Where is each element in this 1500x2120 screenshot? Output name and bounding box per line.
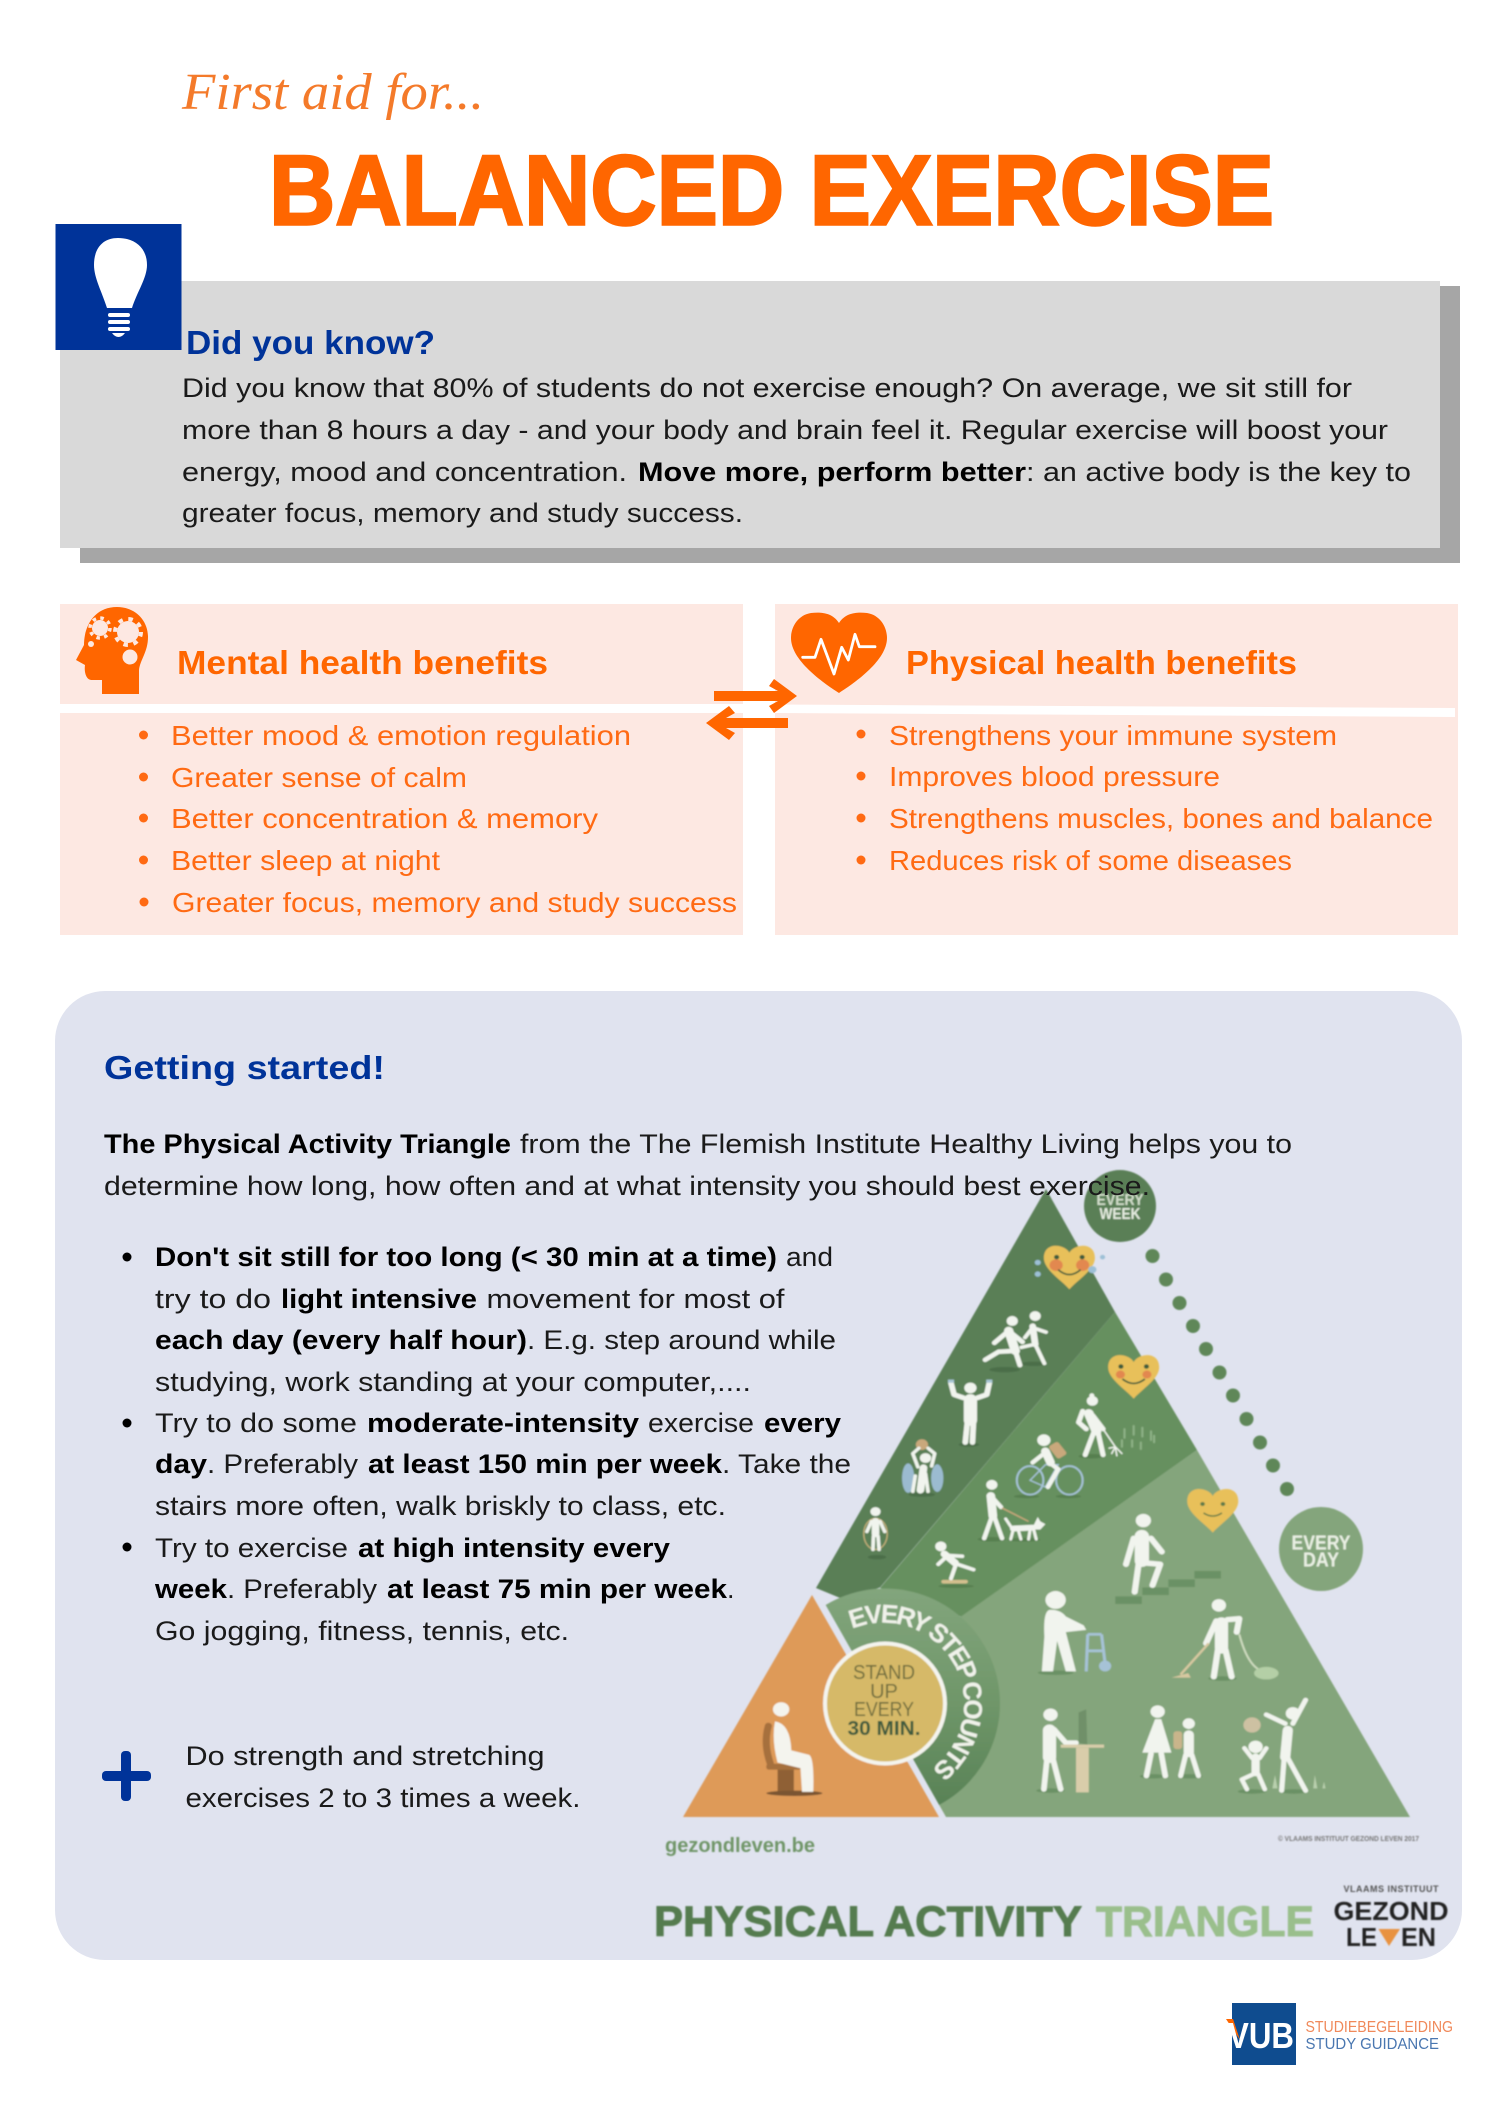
circle: stand up every 30 min: EVERY bbox=[854, 1699, 914, 1721]
list: mental benefits: Greater focus, memory and study success bbox=[172, 887, 737, 918]
icon: light bulb bbox=[56, 224, 182, 350]
list: mental benefits: Better mood & emotion regulation bbox=[171, 720, 631, 751]
list: activity recommendations: and bbox=[786, 1242, 833, 1272]
source: gezondleven.be: gezondleven.be bbox=[665, 1835, 815, 1857]
text: did you know body: greater focus, memory and study success. bbox=[182, 498, 743, 528]
icon: skateboarder bbox=[935, 1541, 974, 1588]
list: activity recommendations: Don't sit still for too long (< 30 min at a time) bbox=[155, 1242, 777, 1272]
circle: stand up every 30 min: UP bbox=[870, 1681, 898, 1703]
circle: stand up every 30 min: STAND bbox=[853, 1662, 915, 1684]
icon: gardener bbox=[1079, 1393, 1154, 1458]
segment: moderate intensity bbox=[880, 1312, 1197, 1616]
arrows: two-way exchange bbox=[706, 679, 797, 740]
heading: Did you know?: Did you know? bbox=[186, 324, 435, 361]
list: activity recommendations: try to do bbox=[155, 1284, 271, 1314]
list: activity recommendations: Try to do some bbox=[155, 1408, 357, 1438]
list: activity recommendations: movement for most of bbox=[486, 1284, 785, 1314]
text: did you know body: more than 8 hours a day - and your body and brain feel it. Regular exercise will boost your bbox=[182, 415, 1388, 445]
label: every step counts: EVERY STEP COUNTS bbox=[848, 1604, 984, 1780]
icon: person at standing desk bbox=[1036, 1708, 1104, 1793]
icon: runners bbox=[985, 1311, 1046, 1372]
list: activity recommendations: week bbox=[154, 1574, 228, 1604]
segment: high intensity bbox=[816, 1189, 1115, 1600]
band: every step counts ring bbox=[825, 1588, 1000, 1805]
badge: every week: EVERY bbox=[1096, 1192, 1144, 1209]
icon: person vacuuming bbox=[1171, 1599, 1279, 1681]
list: activity recommendations: moderate-intensity bbox=[367, 1408, 639, 1438]
badge: every day bbox=[1279, 1507, 1363, 1591]
icon: heart face light bbox=[1187, 1489, 1238, 1533]
dotted frequency line bbox=[1146, 1249, 1294, 1496]
segment: light intensity bbox=[880, 1450, 1410, 1817]
list: mental benefits: Better concentration & memory bbox=[171, 803, 598, 834]
list: activity recommendations: Go jogging, fitness, tennis, etc. bbox=[155, 1616, 569, 1646]
text: did you know body bbox=[182, 373, 1411, 528]
icon: dog walker bbox=[978, 1480, 1045, 1541]
text: triangle introduction: determine how long, how often and at what intensity you should best exercise. bbox=[104, 1171, 1150, 1201]
list: activity recommendations: light intensive bbox=[281, 1284, 477, 1314]
logo: VUB study guidance: STUDY GUIDANCE bbox=[1306, 2036, 1439, 2053]
icon: person with walking frame bbox=[1038, 1591, 1111, 1675]
logo: gezond leven: LE bbox=[1346, 1922, 1377, 1952]
icon: wheelchair athlete bbox=[902, 1439, 943, 1497]
text: strength and stretching: exercises 2 to 3 times a week. bbox=[186, 1783, 580, 1813]
list: activity recommendations: at least 75 min per week bbox=[387, 1574, 728, 1604]
panel: did you know bbox=[56, 224, 1460, 563]
chart title: physical activity triangle: PHYSICAL ACTIVITY bbox=[654, 1898, 1082, 1946]
text: did you know body: : an active body is the key to bbox=[1026, 457, 1411, 487]
list: activity recommendations: each day (every half hour) bbox=[155, 1325, 527, 1355]
kicker: First aid for...: First aid for... bbox=[181, 64, 484, 121]
list: activity recommendations: every bbox=[764, 1408, 841, 1438]
heading: mental health benefits: Mental health benefits bbox=[177, 644, 548, 681]
text: triangle introduction: from the The Flemish Institute Healthy Living helps you to bbox=[520, 1129, 1292, 1159]
text: did you know body: energy, mood and concentration. bbox=[182, 457, 627, 487]
text: did you know body: Did you know that 80% of students do not exercise enough? On average, we sit still for bbox=[182, 373, 1352, 403]
chart title: physical activity triangle: TRIANGLE bbox=[1096, 1898, 1314, 1946]
text: strength and stretching bbox=[186, 1741, 580, 1813]
icon: heart face every week bbox=[1035, 1246, 1105, 1289]
panel: mental health benefits bbox=[60, 604, 743, 935]
logo: gezond leven: VLAAMS INSTITUUT bbox=[1344, 1884, 1439, 1894]
list: activity recommendations: Try to exercise bbox=[155, 1533, 348, 1563]
panel: getting started bbox=[55, 991, 1462, 1960]
icon: stair climber bbox=[1115, 1514, 1221, 1604]
heading: getting started: Getting started! bbox=[104, 1049, 385, 1086]
list: activity recommendations: . Take the bbox=[722, 1449, 851, 1479]
list: mental benefits bbox=[139, 720, 737, 918]
copyright: © VLAAMS INSTITUUT GEZOND LEVEN 2017 bbox=[1278, 1834, 1419, 1843]
text: strength and stretching: Do strength and stretching bbox=[186, 1741, 544, 1771]
icon: cyclist bbox=[1014, 1434, 1083, 1498]
icon: head with gears bbox=[76, 607, 148, 694]
logo: gezond leven bbox=[1334, 1884, 1448, 1952]
icon: heart face every day bbox=[1108, 1355, 1159, 1399]
chart: physical activity triangle bbox=[654, 1169, 1448, 1952]
list: activity recommendations bbox=[122, 1242, 851, 1646]
icon: person with weights bbox=[948, 1381, 992, 1447]
text: did you know body: Move more, perform better bbox=[638, 457, 1027, 487]
logo: VUB study guidance bbox=[1226, 2003, 1453, 2065]
list: activity recommendations: . Preferably bbox=[207, 1449, 359, 1479]
list: activity recommendations: stairs more often, walk briskly to class, etc. bbox=[155, 1491, 726, 1521]
list: activity recommendations: exercise bbox=[648, 1408, 754, 1438]
logo: VUB study guidance: STUDIEBEGELEIDING bbox=[1306, 2019, 1453, 2036]
icon: parent and child with ball bbox=[1238, 1700, 1326, 1794]
heading: physical health benefits: Physical health benefits bbox=[906, 644, 1297, 681]
list: activity recommendations: at high intensity every bbox=[358, 1533, 670, 1563]
badge: every week: WEEK bbox=[1100, 1206, 1141, 1223]
icon: woman and child walking bbox=[1140, 1705, 1203, 1779]
chart title: physical activity triangle bbox=[654, 1898, 1314, 1946]
list: activity recommendations: day bbox=[155, 1449, 207, 1479]
list: physical benefits: Strengthens your immune system bbox=[889, 720, 1337, 751]
icon: seated person bbox=[766, 1702, 822, 1796]
icon: plus bbox=[102, 1751, 151, 1801]
icon: heart with pulse bbox=[791, 613, 887, 693]
list: physical benefits: Reduces risk of some diseases bbox=[889, 845, 1292, 876]
text: triangle introduction bbox=[104, 1129, 1292, 1201]
logo: gezond leven: GEZOND bbox=[1334, 1896, 1448, 1926]
logo: VUB study guidance: VUB bbox=[1228, 2015, 1294, 2056]
badge: every day: DAY bbox=[1303, 1550, 1340, 1572]
panel: physical health benefits bbox=[775, 604, 1458, 935]
icon: jump rope bbox=[864, 1507, 887, 1559]
list: mental benefits: Greater sense of calm bbox=[171, 762, 467, 793]
list: mental benefits: Better sleep at night bbox=[171, 845, 440, 876]
list: activity recommendations: . Preferably bbox=[227, 1574, 378, 1604]
figures and hearts bbox=[766, 1246, 1326, 1796]
list: physical benefits bbox=[856, 720, 1433, 876]
segment: sitting (orange) bbox=[683, 1595, 939, 1817]
badge: every week bbox=[1084, 1170, 1156, 1242]
list: activity recommendations: . bbox=[727, 1574, 735, 1604]
list: activity recommendations: at least 150 min per week bbox=[368, 1449, 723, 1479]
list: physical benefits: Strengthens muscles, bones and balance bbox=[889, 803, 1433, 834]
badge: every day: EVERY bbox=[1292, 1532, 1351, 1554]
circle: stand up every 30 min: 30 MIN. bbox=[848, 1718, 920, 1740]
title: Balanced Exercise: BALANCED EXERCISE bbox=[269, 134, 1274, 246]
list: activity recommendations: . E.g. step around while bbox=[527, 1325, 836, 1355]
logo: gezond leven: EN bbox=[1401, 1922, 1436, 1952]
list: activity recommendations: studying, work standing at your computer,.... bbox=[155, 1367, 751, 1397]
list: physical benefits: Improves blood pressure bbox=[889, 761, 1220, 792]
circle: stand up every 30 min bbox=[825, 1644, 945, 1764]
text: triangle introduction: The Physical Activity Triangle bbox=[104, 1129, 511, 1159]
